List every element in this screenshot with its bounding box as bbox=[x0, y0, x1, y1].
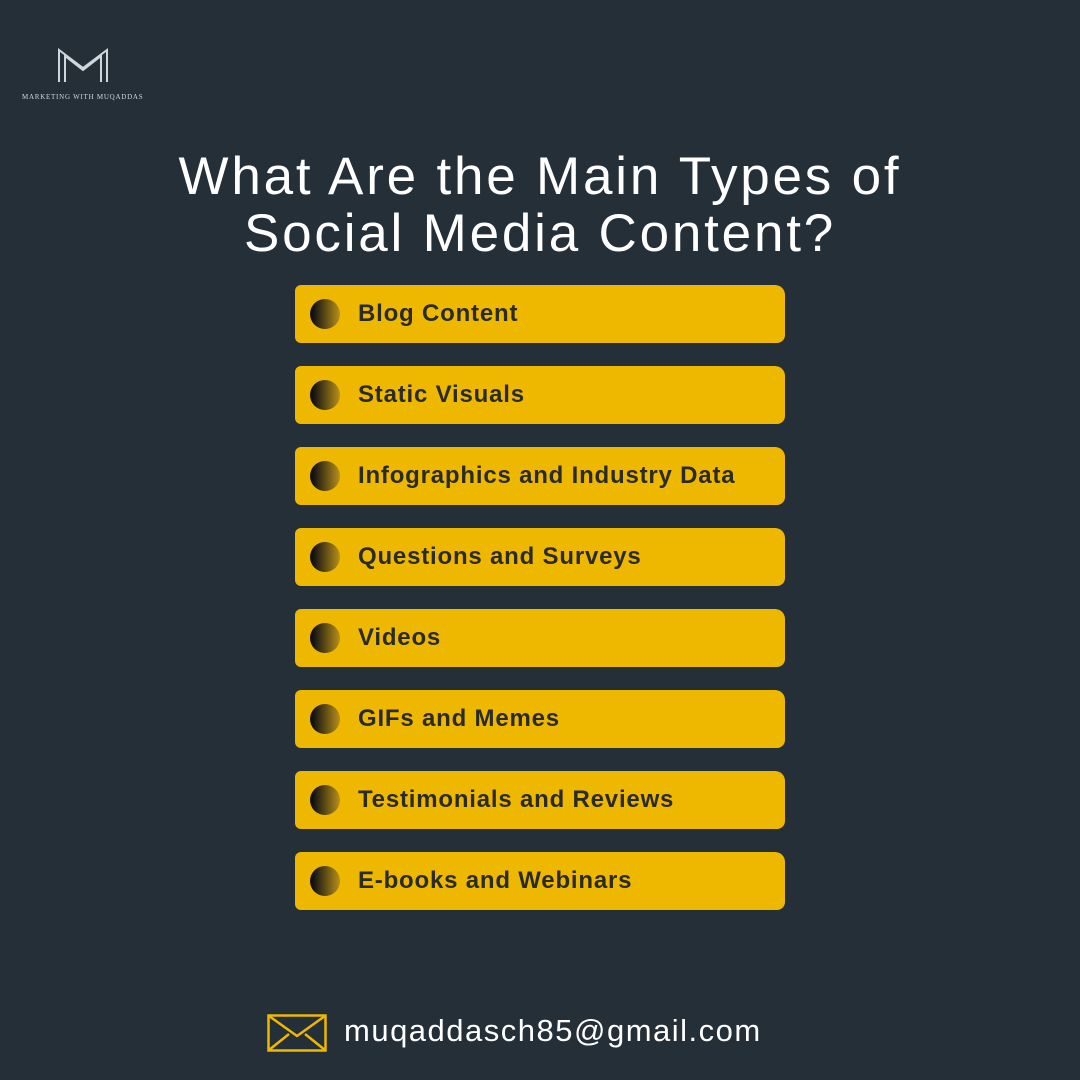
bar: blog content: Blog Content bbox=[358, 300, 518, 327]
bar: ebooks bbox=[295, 852, 785, 910]
bar: questions: Questions and Surveys bbox=[358, 543, 642, 570]
bar: blog content bbox=[295, 285, 785, 343]
bar: videos: Videos bbox=[358, 624, 441, 651]
icon: envelope bbox=[267, 1014, 327, 1052]
logo bbox=[22, 48, 143, 101]
title bbox=[178, 147, 901, 263]
bar: infographics bbox=[295, 447, 785, 505]
bar: ebooks: E-books and Webinars bbox=[358, 867, 632, 894]
bar: gifs: GIFs and Memes bbox=[358, 705, 560, 732]
bar: infographics: Infographics and Industry Data bbox=[358, 462, 735, 489]
bar: videos bbox=[295, 609, 785, 667]
list of content types bbox=[295, 285, 785, 910]
bar: testimonials: Testimonials and Reviews bbox=[358, 786, 674, 813]
bar: gifs bbox=[295, 690, 785, 748]
title: Social Media Content? bbox=[244, 204, 836, 263]
bar: static visuals: Static Visuals bbox=[358, 381, 525, 408]
bar: testimonials bbox=[295, 771, 785, 829]
logo: MARKETING WITH MUQADDAS bbox=[22, 93, 143, 101]
email text: muqaddasch85@gmail.com bbox=[344, 1013, 762, 1048]
bar: static visuals bbox=[295, 366, 785, 424]
title: What Are the Main Types of bbox=[179, 147, 901, 206]
bar: questions bbox=[295, 528, 785, 586]
